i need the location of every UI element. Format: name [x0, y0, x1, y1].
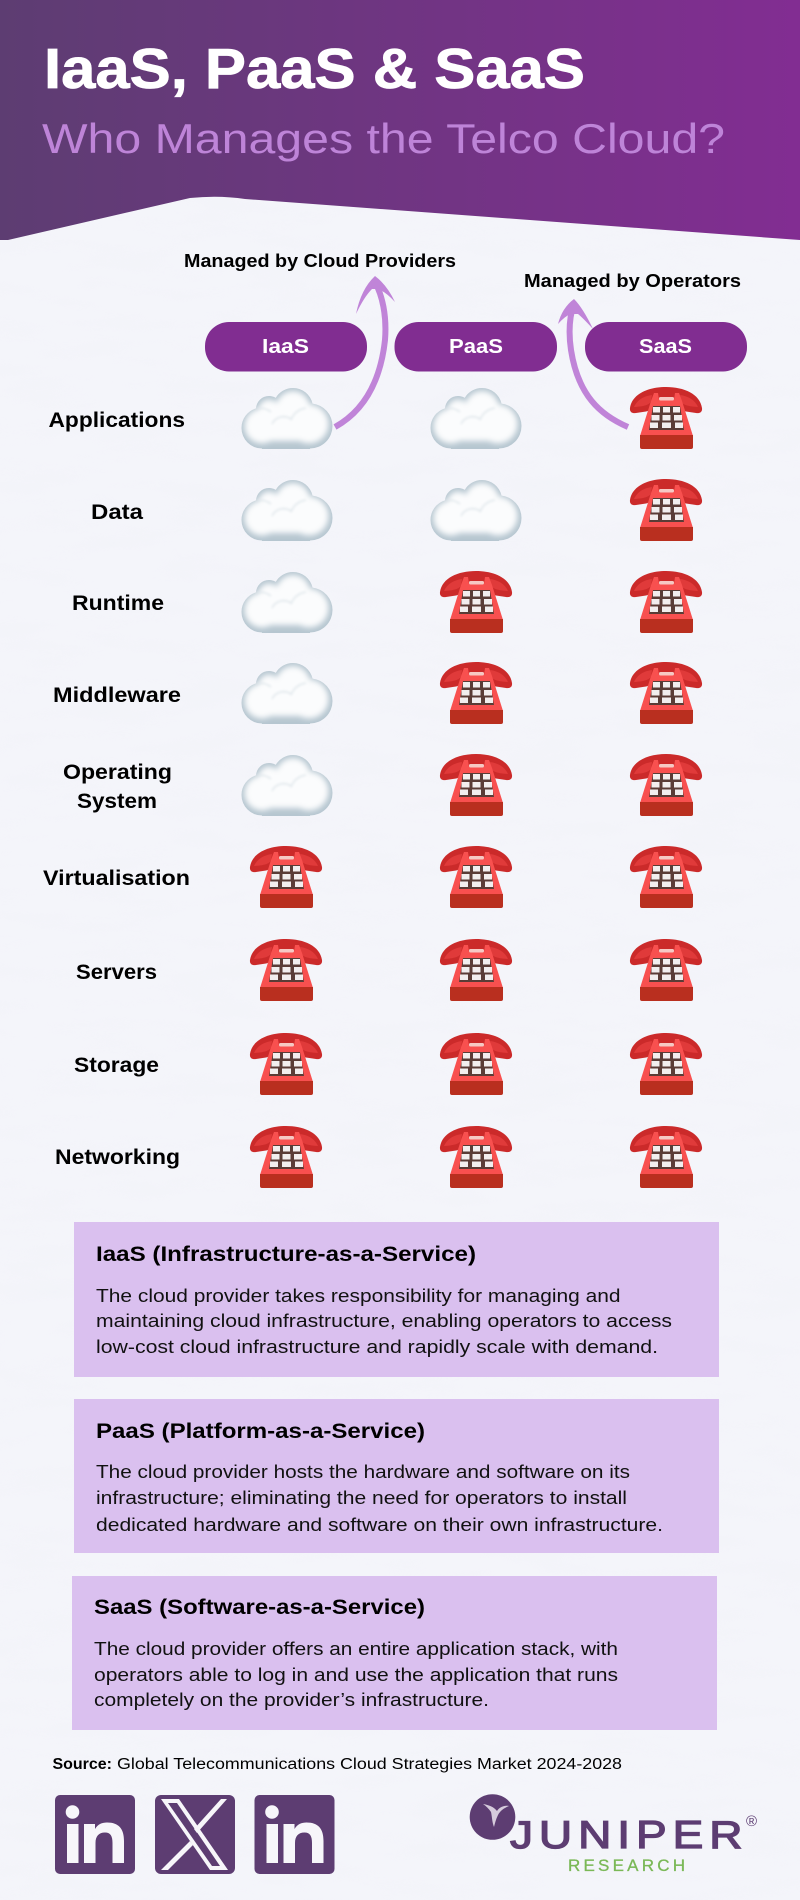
body: SaaS: completely on the provider’s infrastructure.	[94, 1690, 489, 1710]
body: SaaS: operators able to log in and use the application that runs	[94, 1665, 618, 1685]
source note: Global Telecommunications Cloud Strategies Market 2024-2028	[117, 1756, 622, 1773]
heading: SaaS: SaaS (Software-as-a-Service)	[94, 1596, 425, 1619]
icon: LinkedIn second	[254, 1795, 334, 1874]
title: IaaS, PaaS & SaaS	[44, 37, 585, 101]
row: Applications: Applications	[48, 409, 185, 432]
row: Networking	[55, 1126, 702, 1188]
row: Operating System	[63, 753, 702, 818]
label: managed by cloud providers: Managed by Cloud Providers	[184, 251, 456, 271]
body: SaaS	[94, 1639, 618, 1710]
body: PaaS	[96, 1462, 663, 1535]
row: Data: Data	[91, 501, 143, 524]
row: Operating System: System	[77, 790, 157, 813]
row: Storage	[74, 1033, 702, 1095]
wordmark: JUNIPER	[510, 1813, 742, 1857]
heading: IaaS: IaaS (Infrastructure-as-a-Service)	[96, 1243, 476, 1266]
column header: SaaS: SaaS	[639, 336, 692, 358]
row: Middleware: Middleware	[53, 684, 181, 707]
registered mark: ®	[746, 1813, 757, 1830]
subtitle: Who Manages the Telco Cloud?	[42, 115, 725, 162]
icon: LinkedIn	[55, 1795, 135, 1874]
panel: IaaS definition	[74, 1222, 719, 1377]
column header: PaaS	[394, 322, 557, 372]
column header: SaaS	[585, 322, 747, 372]
header banner	[0, 0, 800, 240]
arrow: cloud providers	[335, 276, 395, 427]
tagline: RESEARCH	[568, 1856, 685, 1875]
row: Storage: Storage	[74, 1054, 159, 1077]
body: IaaS: low-cost cloud infrastructure and rapidly scale with demand.	[96, 1337, 658, 1357]
row: Runtime: Runtime	[72, 592, 164, 615]
source note: Source:	[52, 1756, 112, 1773]
row: Operating System: Operating	[63, 761, 172, 784]
row: Runtime	[72, 570, 702, 635]
body: SaaS: The cloud provider offers an entire application stack, with	[94, 1639, 618, 1659]
body: PaaS: dedicated hardware and software on their own infrastructure.	[96, 1515, 663, 1535]
row: Virtualisation: Virtualisation	[43, 867, 190, 890]
row: Data	[91, 478, 702, 543]
column header: PaaS: PaaS	[449, 336, 503, 358]
icon: X	[155, 1795, 235, 1874]
row: Servers: Servers	[76, 961, 157, 984]
row: Networking: Networking	[55, 1146, 180, 1169]
label: managed by operators: Managed by Operators	[524, 271, 741, 291]
body: PaaS: infrastructure; eliminating the need for operators to install	[96, 1488, 627, 1508]
row: Applications	[48, 386, 702, 451]
body: IaaS: maintaining cloud infrastructure, enabling operators to access	[96, 1311, 672, 1331]
logo: Juniper Research	[470, 1794, 757, 1875]
row: Virtualisation	[43, 846, 702, 908]
heading: PaaS: PaaS (Platform-as-a-Service)	[96, 1420, 425, 1443]
panel: PaaS definition	[74, 1399, 719, 1553]
row: Servers	[76, 939, 702, 1001]
row: Middleware	[53, 661, 702, 726]
column header: IaaS	[205, 322, 367, 372]
arrow: operators	[558, 299, 628, 427]
body: IaaS	[96, 1286, 672, 1357]
body: PaaS: The cloud provider hosts the hardware and software on its	[96, 1462, 630, 1482]
column header: IaaS: IaaS	[262, 336, 309, 358]
body: IaaS: The cloud provider takes responsibility for managing and	[96, 1286, 620, 1306]
panel: SaaS definition	[72, 1576, 717, 1730]
